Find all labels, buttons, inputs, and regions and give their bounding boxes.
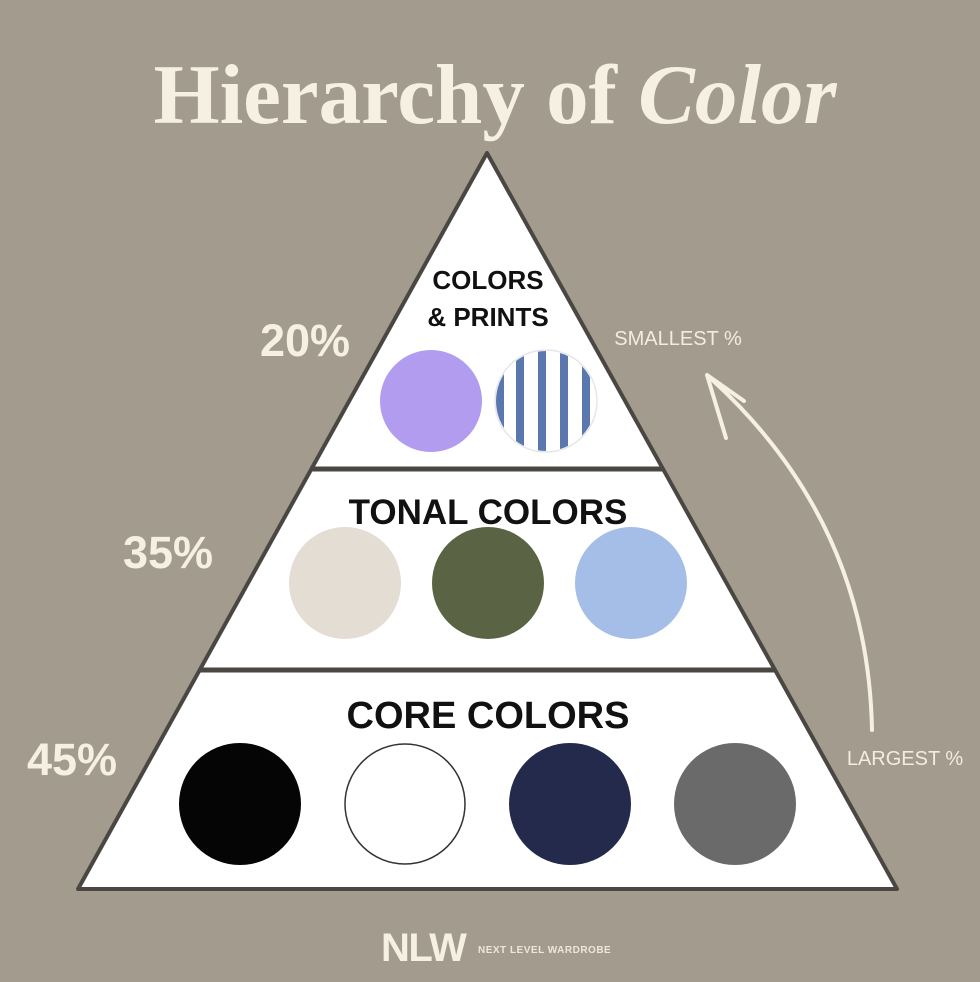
percentages: 20% <box>260 315 350 366</box>
percentages <box>27 315 350 785</box>
tier: tonal colors <box>289 493 687 639</box>
logo: NLW <box>381 926 467 970</box>
percentages: 35% <box>123 527 213 578</box>
label: smallest: SMALLEST % <box>614 328 742 350</box>
label: largest: LARGEST % <box>847 748 963 770</box>
percentages: 45% <box>27 734 117 785</box>
tier: colors & prints: & PRINTS <box>427 302 549 332</box>
logo: NEXT LEVEL WARDROBE <box>478 945 611 956</box>
tier: tonal colors: TONAL COLORS <box>349 493 627 532</box>
tier: core colors: CORE COLORS <box>347 695 629 737</box>
pyramid <box>78 153 897 889</box>
title: Hierarchy of Color <box>153 48 837 142</box>
tier: colors & prints <box>380 265 598 453</box>
logo <box>381 926 611 970</box>
tier: core colors <box>179 695 796 865</box>
tier: colors & prints: COLORS <box>432 265 544 295</box>
arrow <box>707 375 872 730</box>
